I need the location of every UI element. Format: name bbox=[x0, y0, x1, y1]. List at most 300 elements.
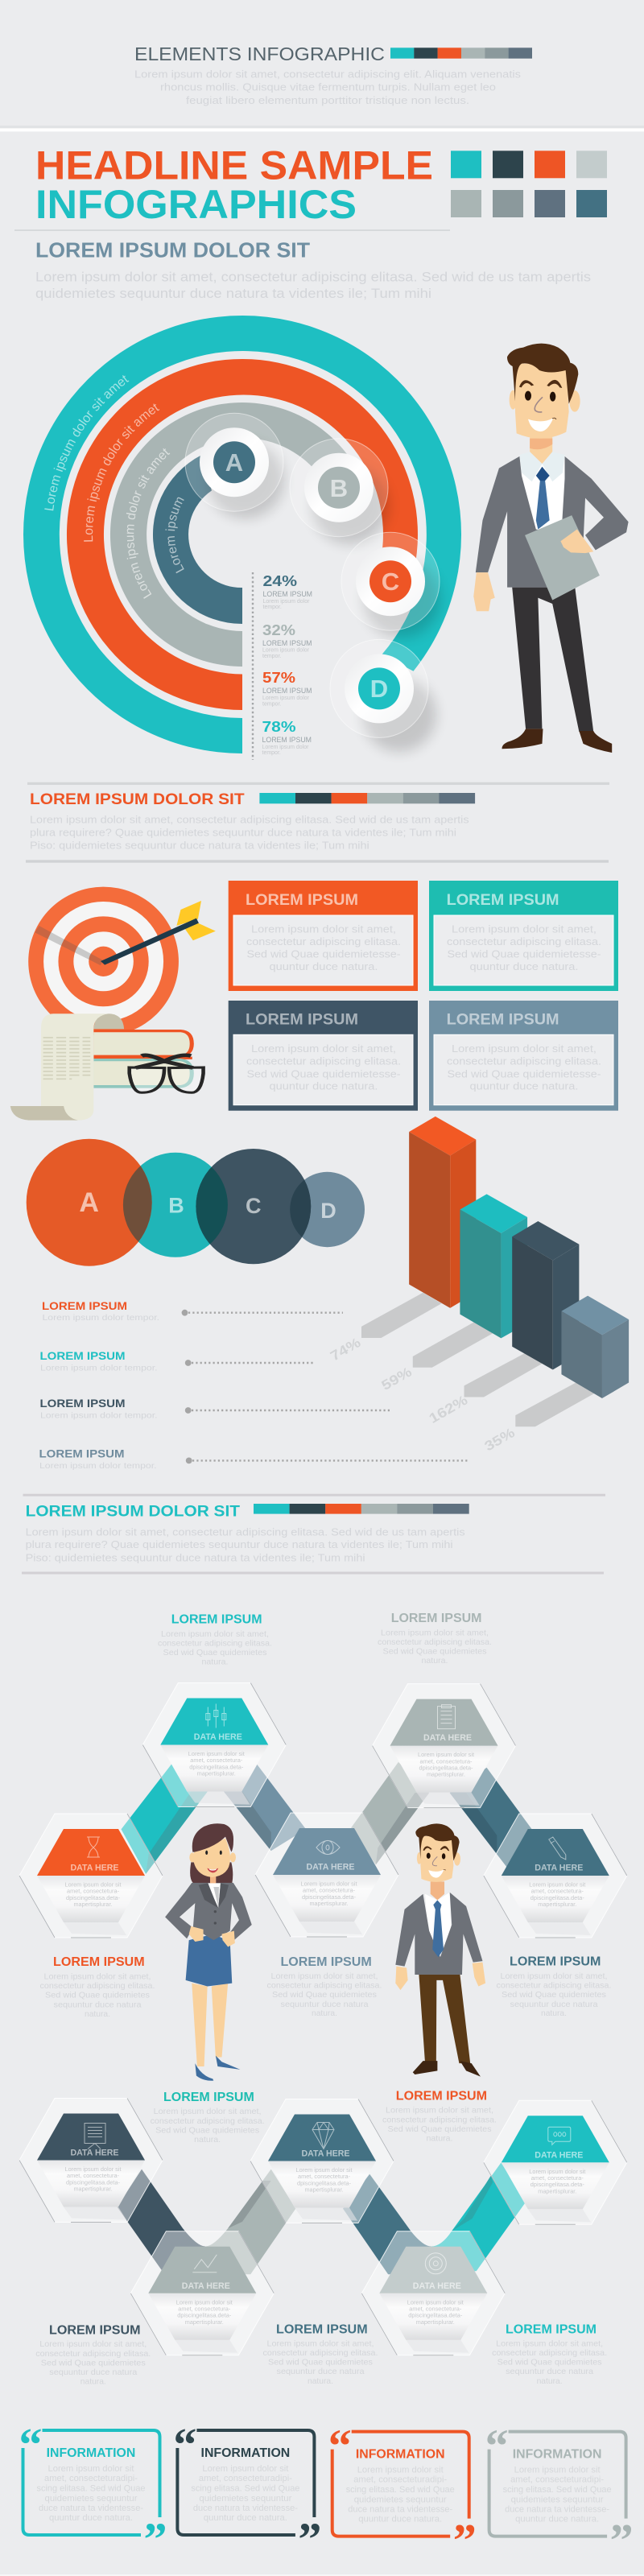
hexagon: chat (teal): amet, consectetura- bbox=[531, 2176, 584, 2182]
panel: orange: LOREM IPSUM bbox=[246, 891, 358, 909]
panel: orange: Lorem ipsum dolor sit amet, bbox=[251, 923, 396, 935]
stat 24%: LOREM IPSUM bbox=[262, 590, 312, 598]
colour strip bbox=[254, 1504, 469, 1514]
panel: steel: consectetur adipiscing elitasa. bbox=[447, 1055, 601, 1067]
caption: grey: natura. bbox=[422, 1656, 448, 1666]
panel: navy: Lorem ipsum dolor sit amet, bbox=[251, 1042, 396, 1055]
marker D: D bbox=[370, 675, 388, 703]
caption: grey bbox=[378, 1612, 492, 1666]
quote box: navy: “ bbox=[173, 2418, 196, 2471]
bar: orange bbox=[409, 1117, 476, 1308]
businessman with clipboard bbox=[473, 344, 629, 753]
caption: blue: sequuntur duce natura bbox=[277, 2367, 365, 2376]
hexagon: presentation (navy): Lorem ipsum dolor sit bbox=[64, 2167, 122, 2173]
ring labels: Lorem ipsum dolor sit amet bbox=[84, 403, 159, 542]
caption: steel: Sed wid Quae quidemietes bbox=[272, 1990, 377, 2000]
quote box: navy: ” bbox=[298, 2513, 321, 2566]
venn diagram bbox=[27, 1139, 365, 1266]
quote box: grey: Lorem ipsum dolor sit bbox=[514, 2465, 601, 2475]
caption: orange: consectetur adipiscing elitasa. bbox=[382, 2115, 497, 2124]
panel: steel: LOREM IPSUM bbox=[447, 1011, 559, 1029]
hexagon: diamond (blue): DATA HERE bbox=[301, 2149, 349, 2159]
icon: glasses bbox=[130, 1055, 204, 1092]
caption: blue: Lorem ipsum dolor sit amet, bbox=[267, 2339, 374, 2348]
quote box: grey: INFORMATION bbox=[513, 2447, 601, 2461]
colour strip bbox=[259, 793, 475, 803]
legend item 1: Lorem ipsum dolor tempor. bbox=[42, 1313, 159, 1323]
stat 32%: Lorem ipsum dolor bbox=[262, 647, 310, 654]
stat 78% bbox=[262, 719, 312, 756]
caption: blue: natura. bbox=[308, 2376, 333, 2386]
bar values bbox=[328, 1335, 518, 1454]
caption: steel bbox=[267, 1955, 382, 2018]
quote box: orange: amet, consecteturadipi- bbox=[353, 2475, 448, 2485]
venn diagram: B bbox=[168, 1193, 184, 1217]
legend item 1 bbox=[42, 1299, 343, 1323]
caption: teal: LOREM IPSUM bbox=[171, 1613, 262, 1627]
panel: orange: consectetur adipiscing elitasa. bbox=[246, 935, 401, 947]
icon: chat bubble bbox=[548, 2127, 571, 2145]
hexagon: hourglass (orange): DATA HERE bbox=[71, 1863, 119, 1872]
panel: steel: Sed wid Quae quidemietesse- bbox=[448, 1067, 601, 1080]
panel: navy: consectetur adipiscing elitasa. bbox=[246, 1055, 401, 1067]
caption: teal: LOREM IPSUM bbox=[163, 2091, 254, 2104]
caption: orange: Sed wid Quae quidemietes bbox=[388, 2124, 491, 2134]
caption: steel: Lorem ipsum dolor sit amet, bbox=[270, 1971, 378, 1981]
caption: teal: natura. bbox=[201, 1657, 229, 1667]
hexagon: candles (teal): amet, consectetura- bbox=[190, 1758, 243, 1764]
stat 24% bbox=[262, 573, 312, 610]
legend item 3: LOREM IPSUM bbox=[40, 1397, 126, 1410]
quote box: grey: duce natura ta videntesse- bbox=[505, 2505, 609, 2515]
caption: teal right bbox=[492, 2322, 607, 2386]
icon: candlesticks bbox=[206, 1703, 226, 1728]
icon: pencil bbox=[549, 1837, 566, 1860]
section text: Lorem ipsum dolor sit amet, consectetur adipiscing elitasa. Sed wid de us tam apertis bbox=[26, 1525, 465, 1538]
icon: presentation board bbox=[85, 2124, 105, 2149]
concentric ring chart bbox=[23, 316, 461, 757]
hexagon: eye (steel): amet, consectetura- bbox=[303, 1889, 356, 1894]
caption: teal right: Lorem ipsum dolor sit amet, bbox=[496, 2339, 603, 2348]
head bbox=[507, 344, 580, 439]
bar: navy bbox=[512, 1221, 579, 1369]
quote box: teal: scing elitasa. Sed wid Quae bbox=[37, 2483, 145, 2493]
hexagon: clipboard (grey) bbox=[372, 1684, 515, 1808]
hexagon: pencil (blue): Lorem ipsum dolor sit bbox=[529, 1882, 585, 1889]
headline: HEADLINE SAMPLE bbox=[35, 142, 433, 188]
caption: blue: Sed wid Quae quidemietes bbox=[268, 2358, 373, 2368]
caption: blue bbox=[262, 2322, 378, 2386]
hexagon: candles (teal): mapertisplurar. bbox=[197, 1771, 236, 1777]
hexagon: presentation (navy) bbox=[19, 2098, 163, 2222]
stat 78%: LOREM IPSUM bbox=[262, 736, 312, 744]
quote box: navy: amet, consecteturadipi- bbox=[199, 2474, 292, 2483]
section text: Piso: quidemietes sequuntur duce natura ta videntes ile; Tum mihi bbox=[26, 1552, 365, 1563]
caption: blue bbox=[496, 1955, 612, 2018]
section heading: LOREM IPSUM DOLOR SIT bbox=[30, 791, 245, 808]
caption: blue: LOREM IPSUM bbox=[276, 2322, 368, 2336]
stat 57% bbox=[262, 670, 312, 707]
bar values: 74% bbox=[328, 1335, 363, 1364]
hexagon: line chart (grey): DATA HERE bbox=[182, 2281, 230, 2291]
quote box: orange: INFORMATION bbox=[356, 2447, 445, 2461]
caption: orange: Sed wid Quae quidemietes bbox=[45, 1991, 150, 2000]
icon: target bbox=[28, 887, 179, 1036]
icon: target dial bbox=[425, 2253, 446, 2274]
hexagon: eye (steel): DATA HERE bbox=[306, 1863, 354, 1872]
isometric bar chart bbox=[328, 1117, 629, 1454]
quote box: teal: amet, consecteturadipi- bbox=[44, 2474, 138, 2483]
panel: steel: Lorem ipsum dolor sit amet, bbox=[452, 1042, 597, 1055]
icon: diamond bbox=[312, 2122, 334, 2149]
caption: blue: Lorem ipsum dolor sit amet, bbox=[501, 1971, 607, 1981]
hexagon: candles (teal): DATA HERE bbox=[194, 1732, 242, 1742]
caption: teal bbox=[158, 1613, 272, 1667]
hexagon: hourglass (orange): Lorem ipsum dolor sit bbox=[64, 1882, 122, 1889]
caption: steel: consectetur adipiscing elitasa. bbox=[267, 1980, 382, 1990]
quote box: teal: duce natura ta videntesse- bbox=[39, 2504, 143, 2513]
venn diagram: D bbox=[320, 1199, 336, 1223]
caption: steel: LOREM IPSUM bbox=[280, 1955, 372, 1969]
ring labels: Lorem ipsum bbox=[166, 497, 184, 573]
hexagon: chat (teal): mapertisplurar. bbox=[538, 2189, 576, 2194]
caption: grey: Lorem ipsum dolor sit amet, bbox=[381, 1629, 489, 1638]
legend item 4 bbox=[39, 1447, 469, 1471]
hexagon: pencil (blue) bbox=[484, 1814, 627, 1938]
hexagon: line chart (grey): Lorem ipsum dolor sit bbox=[176, 2300, 233, 2306]
legend item 3 bbox=[40, 1397, 391, 1420]
caption: orange bbox=[40, 1955, 155, 2019]
marker A bbox=[185, 413, 284, 518]
panel: orange bbox=[229, 881, 418, 991]
hexagon: chat (teal): DATA HERE bbox=[535, 2150, 583, 2160]
section: lorem ipsum dolor sit (teal) bbox=[22, 1494, 605, 1575]
ring: blue bbox=[153, 455, 242, 624]
quote box: orange: quidemietes sequuntur bbox=[354, 2496, 447, 2505]
caption: teal: Sed wid Quae quidemietes bbox=[163, 1648, 267, 1657]
venn diagram: C bbox=[246, 1194, 262, 1218]
section text: Piso: quidemietes sequuntur duce natura ta videntes ile; Tum mihi bbox=[30, 840, 369, 852]
caption: teal: Sed wid Quae quidemietes bbox=[155, 2125, 259, 2135]
ring: orange bbox=[67, 359, 418, 710]
quote box: grey: “ bbox=[485, 2420, 509, 2472]
intro text: rhoncus mollis. Quisque vitae fermentum turpis. Nullam eget leo bbox=[160, 81, 496, 93]
quote box: teal: “ bbox=[19, 2418, 42, 2471]
hexagon: pencil (blue): amet, consectetura- bbox=[531, 1889, 584, 1895]
quote box: grey bbox=[485, 2420, 634, 2567]
caption: navy: Lorem ipsum dolor sit amet, bbox=[39, 2339, 147, 2349]
quote box: teal: INFORMATION bbox=[47, 2446, 135, 2460]
caption: blue: Sed wid Quae quidemietes bbox=[502, 1990, 606, 2000]
hexagon: pencil (blue): mapertisplurar. bbox=[538, 1902, 576, 1908]
caption: teal bbox=[151, 2091, 265, 2145]
ring labels bbox=[44, 375, 184, 599]
stat 24%: Lorem ipsum dolor bbox=[262, 599, 310, 605]
hexagon: line chart (grey): amet, consectetura- bbox=[178, 2307, 231, 2313]
icon: scroll bbox=[10, 1013, 124, 1121]
title: elements infographic: ELEMENTS INFOGRAPHIC bbox=[134, 43, 385, 64]
quote box: orange: ” bbox=[453, 2515, 477, 2567]
stat 32%: 32% bbox=[262, 622, 295, 638]
section text bbox=[30, 813, 469, 852]
ring labels: Lorem ipsum dolor sit amet bbox=[44, 375, 129, 510]
info panels bbox=[229, 881, 618, 1111]
caption: teal right: natura. bbox=[537, 2376, 563, 2386]
caption: orange bbox=[382, 2090, 497, 2144]
stat 32%: tempor. bbox=[262, 654, 281, 659]
hexagon: clipboard (grey): dpiscingelitasa.deta- bbox=[419, 1766, 473, 1772]
caption: teal: consectetur adipiscing elitasa. bbox=[151, 2116, 265, 2126]
panel: teal: Sed wid Quae quidemietesse- bbox=[448, 948, 601, 960]
hexagon: line chart (grey) bbox=[130, 2231, 274, 2355]
intro text: Lorem ipsum dolor sit amet, consectetur adipiscing elit. Aliquam venenatis bbox=[134, 68, 522, 80]
stat 57%: LOREM IPSUM bbox=[262, 687, 312, 695]
hexagon: diamond (blue): amet, consectetura- bbox=[298, 2174, 351, 2180]
panel: teal: Lorem ipsum dolor sit amet, bbox=[452, 923, 597, 935]
panel: teal: consectetur adipiscing elitasa. bbox=[447, 935, 601, 947]
caption: blue: sequuntur duce natura bbox=[510, 2000, 598, 2009]
stat 78%: 78% bbox=[262, 719, 296, 735]
lower hexagon ribbons bbox=[117, 2162, 526, 2274]
legend item 4: Lorem ipsum dolor tempor. bbox=[39, 1461, 156, 1471]
section: lorem ipsum dolor sit (orange) bbox=[26, 782, 609, 863]
caption: blue: consectetur adipiscing elitasa. bbox=[496, 1980, 612, 1990]
hexagon: presentation (navy): amet, consectetura- bbox=[67, 2174, 120, 2179]
quote box: teal: ” bbox=[143, 2513, 167, 2566]
hexagon: chat (teal): Lorem ipsum dolor sit bbox=[529, 2169, 585, 2175]
icon: eye bbox=[316, 1840, 340, 1855]
quote box: orange: Lorem ipsum dolor sit bbox=[357, 2465, 444, 2475]
hexagon: eye (steel): mapertisplurar. bbox=[309, 1901, 349, 1907]
intro paragraph: quidemietes sequuntur duce natura ta videntes ile; Tum mihi bbox=[35, 287, 431, 301]
head bbox=[415, 1823, 460, 1882]
hexagon: line chart (grey): mapertisplurar. bbox=[185, 2320, 224, 2326]
quote box: teal: Lorem ipsum dolor sit bbox=[48, 2464, 134, 2474]
panel: steel: quuntur duce natura. bbox=[470, 1080, 578, 1092]
upper hexagon ribbons bbox=[122, 1762, 532, 1874]
legend item 3: Lorem ipsum dolor tempor. bbox=[40, 1410, 158, 1420]
quote box: orange: duce natura ta videntesse- bbox=[348, 2505, 453, 2515]
hexagon: chat (teal): dpiscingelitasa.deta- bbox=[530, 2182, 584, 2188]
hexagon: target (light grey) bbox=[361, 2231, 505, 2355]
quote box: navy: scing elitasa. Sed wid Quae bbox=[191, 2483, 299, 2493]
hexagon: clipboard (grey): mapertisplurar. bbox=[427, 1773, 465, 1778]
caption: teal right: Sed wid Quae quidemietes bbox=[497, 2358, 602, 2368]
caption: steel: natura. bbox=[312, 2008, 337, 2018]
subheading: LOREM IPSUM DOLOR SIT bbox=[35, 237, 310, 262]
ring labels: Lorem ipsum dolor sit amet bbox=[126, 448, 171, 599]
section text: Lorem ipsum dolor sit amet, consectetur adipiscing elitasa. Sed wid de us tam apertis bbox=[30, 813, 469, 825]
panel: teal bbox=[429, 881, 618, 991]
intro text bbox=[134, 68, 522, 106]
hexagon: hourglass (orange) bbox=[19, 1814, 163, 1938]
caption: teal: Lorem ipsum dolor sit amet, bbox=[161, 1629, 269, 1639]
ring: grey bbox=[110, 402, 347, 667]
hexagon: target (light grey): mapertisplurar. bbox=[416, 2320, 455, 2326]
headline: INFOGRAPHICS bbox=[35, 182, 357, 227]
quote box: navy: Lorem ipsum dolor sit bbox=[202, 2464, 288, 2474]
hexagon: eye (steel): dpiscingelitasa.deta- bbox=[302, 1895, 357, 1901]
percentage legend bbox=[253, 572, 312, 760]
caption: steel: sequuntur duce natura bbox=[280, 2000, 369, 2009]
quote box: grey: scing elitasa. Sed wid Quae bbox=[503, 2485, 612, 2495]
hexagon: hourglass (orange): mapertisplurar. bbox=[74, 1902, 113, 1908]
hexagon: line chart (grey): dpiscingelitasa.deta- bbox=[177, 2314, 232, 2319]
quote box: teal: quuntur duce natura. bbox=[49, 2513, 133, 2523]
caption: orange: natura. bbox=[427, 2134, 452, 2144]
quote box: navy bbox=[173, 2418, 321, 2566]
hexagon: presentation (navy): dpiscingelitasa.deta- bbox=[66, 2180, 121, 2186]
hexagon: pencil (blue): DATA HERE bbox=[535, 1863, 583, 1872]
hexagon: hourglass (orange): dpiscingelitasa.deta- bbox=[66, 1896, 121, 1901]
intro text: feugiat libero elementum porttitor tristique non lectus. bbox=[186, 94, 469, 106]
panel: navy: LOREM IPSUM bbox=[246, 1011, 358, 1029]
bar values: 59% bbox=[379, 1364, 415, 1393]
hexagon: pencil (blue): dpiscingelitasa.deta- bbox=[530, 1896, 584, 1901]
header block bbox=[134, 43, 532, 106]
stat 57%: tempor. bbox=[262, 702, 281, 707]
hexagon: candles (teal): dpiscingelitasa.deta- bbox=[189, 1765, 244, 1770]
quote box: grey: amet, consecteturadipi- bbox=[510, 2475, 604, 2485]
headline bbox=[35, 142, 433, 227]
hexagon: target (light grey): amet, consectetura- bbox=[409, 2307, 462, 2313]
caption: blue: consectetur adipiscing elitasa. bbox=[262, 2348, 378, 2358]
panel: steel bbox=[429, 1001, 618, 1111]
quote box: orange: scing elitasa. Sed wid Quae bbox=[346, 2485, 455, 2495]
legend item 2: Lorem ipsum dolor tempor. bbox=[40, 1364, 158, 1373]
caption: blue: natura. bbox=[541, 2008, 567, 2018]
quote box: teal: quidemietes sequuntur bbox=[45, 2494, 138, 2504]
stat 24%: 24% bbox=[262, 573, 297, 589]
caption: teal: natura. bbox=[194, 2135, 221, 2145]
quote box: grey: quuntur duce natura. bbox=[515, 2515, 599, 2524]
hexagon: candles (teal): Lorem ipsum dolor sit bbox=[188, 1752, 245, 1757]
section text: plura requirere? Quae quidemietes sequuntur duce natura ta videntes ile; Tum mihi bbox=[26, 1538, 453, 1550]
stat 78%: tempor. bbox=[262, 750, 281, 756]
caption: navy: consectetur adipiscing elitasa. bbox=[35, 2349, 151, 2359]
legend item 2 bbox=[40, 1349, 313, 1373]
bar values: 35% bbox=[482, 1425, 518, 1454]
hexagon: eye (steel): Lorem ipsum dolor sit bbox=[301, 1882, 357, 1887]
stat 24%: tempor. bbox=[262, 605, 282, 610]
caption: grey: Sed wid Quae quidemietes bbox=[383, 1647, 486, 1657]
hexagon: candles (teal) bbox=[142, 1682, 286, 1806]
panel: teal: LOREM IPSUM bbox=[447, 891, 559, 909]
caption: blue: LOREM IPSUM bbox=[510, 1955, 601, 1969]
hexagon: clipboard (grey): DATA HERE bbox=[423, 1733, 472, 1743]
quote box: navy: duce natura ta videntesse- bbox=[193, 2504, 298, 2513]
caption: orange: Lorem ipsum dolor sit amet, bbox=[43, 1972, 151, 1982]
marker D bbox=[330, 639, 436, 752]
caption: grey: LOREM IPSUM bbox=[391, 1612, 481, 1625]
caption: teal: consectetur adipiscing elitasa. bbox=[158, 1639, 272, 1649]
hexagon: clipboard (grey): amet, consectetura- bbox=[420, 1759, 473, 1765]
dotted legend bbox=[39, 1299, 469, 1471]
caption: orange: sequuntur duce natura bbox=[53, 2000, 142, 2009]
quote box: orange: quuntur duce natura. bbox=[358, 2515, 442, 2524]
caption: orange: LOREM IPSUM bbox=[396, 2090, 487, 2103]
bar values: 162% bbox=[427, 1393, 470, 1426]
icon: hourglass bbox=[87, 1837, 100, 1857]
icon: arrow bbox=[101, 901, 216, 965]
quote box: grey: ” bbox=[610, 2515, 634, 2567]
caption: navy: LOREM IPSUM bbox=[49, 2324, 140, 2338]
stat 57%: 57% bbox=[262, 670, 295, 686]
hexagon: diamond (blue) bbox=[250, 2099, 394, 2223]
hexagon: clipboard (grey): Lorem ipsum dolor sit bbox=[418, 1752, 474, 1758]
hexagon: target (light grey): DATA HERE bbox=[413, 2281, 461, 2291]
caption: orange: natura. bbox=[85, 2009, 110, 2019]
venn diagram: A bbox=[79, 1187, 99, 1218]
quote box: grey: quidemietes sequuntur bbox=[511, 2496, 604, 2505]
panel: navy bbox=[229, 1001, 418, 1111]
hexagon: diamond (blue): Lorem ipsum dolor sit bbox=[296, 2168, 353, 2174]
panel: orange: quuntur duce natura. bbox=[269, 960, 378, 972]
quote box: navy: INFORMATION bbox=[201, 2446, 290, 2460]
caption: teal: Lorem ipsum dolor sit amet, bbox=[154, 2107, 262, 2116]
panel: navy: Sed wid Quae quidemietesse- bbox=[246, 1067, 401, 1080]
stat 32%: LOREM IPSUM bbox=[262, 639, 312, 647]
quote box: navy: quidemietes sequuntur bbox=[199, 2494, 292, 2504]
intro paragraph bbox=[35, 270, 591, 301]
caption: grey: consectetur adipiscing elitasa. bbox=[378, 1637, 492, 1647]
panel: orange: Sed wid Quae quidemietesse- bbox=[246, 948, 401, 960]
quote box: orange: “ bbox=[328, 2420, 352, 2472]
businesswoman bbox=[165, 1823, 252, 2081]
caption: navy: natura. bbox=[80, 2377, 106, 2387]
stat 32% bbox=[262, 622, 312, 659]
intro paragraph: Lorem ipsum dolor sit amet, consectetur adipiscing elitasa. Sed wid de us tam apertis bbox=[35, 270, 591, 284]
marker C: C bbox=[382, 568, 399, 596]
quote box: navy: quuntur duce natura. bbox=[204, 2513, 287, 2523]
marker B: B bbox=[330, 474, 348, 502]
hexagon: presentation (navy): mapertisplurar. bbox=[74, 2186, 113, 2193]
bar shadows bbox=[361, 1293, 596, 1426]
section text bbox=[26, 1525, 465, 1563]
bar: steel bbox=[561, 1296, 629, 1398]
caption: orange: Lorem ipsum dolor sit amet, bbox=[386, 2106, 493, 2116]
ring: teal bbox=[23, 316, 461, 753]
quote box: teal bbox=[19, 2418, 167, 2566]
legend item 2: LOREM IPSUM bbox=[40, 1349, 126, 1362]
caption: orange: LOREM IPSUM bbox=[53, 1955, 145, 1969]
hexagon: eye (steel) bbox=[255, 1813, 398, 1937]
icon: line chart bbox=[192, 2255, 217, 2273]
section text: plura requirere? Quae quidemietes sequuntur duce natura ta videntes ile; Tum mihi bbox=[30, 827, 456, 839]
upper hexagon captions bbox=[40, 1612, 612, 2019]
caption: navy: Sed wid Quae quidemietes bbox=[41, 2358, 146, 2368]
hexagon: target (light grey): Lorem ipsum dolor sit bbox=[407, 2300, 464, 2306]
bar: teal bbox=[460, 1194, 527, 1338]
quote box: orange bbox=[328, 2420, 477, 2567]
hexagon: presentation (navy): DATA HERE bbox=[71, 2148, 119, 2157]
businessman 2 bbox=[395, 1823, 485, 2077]
lower hexagon captions bbox=[35, 2090, 607, 2387]
hexagon: diamond (blue): dpiscingelitasa.deta- bbox=[297, 2181, 352, 2186]
hexagon: diamond (blue): mapertisplurar. bbox=[304, 2188, 344, 2193]
caption: teal right: consectetur adipiscing elitasa. bbox=[492, 2348, 607, 2358]
stat 78%: Lorem ipsum dolor bbox=[262, 745, 309, 750]
marker A: A bbox=[225, 448, 243, 477]
marker C bbox=[341, 532, 440, 638]
caption: teal right: LOREM IPSUM bbox=[506, 2322, 597, 2336]
caption: teal right: sequuntur duce natura bbox=[506, 2367, 593, 2376]
target, books and glasses illustration bbox=[10, 887, 216, 1121]
colour strip bbox=[390, 47, 532, 59]
icon: books bbox=[93, 1030, 194, 1088]
legend item 1: LOREM IPSUM bbox=[42, 1299, 127, 1312]
hexagon: chat (teal) bbox=[484, 2100, 627, 2224]
